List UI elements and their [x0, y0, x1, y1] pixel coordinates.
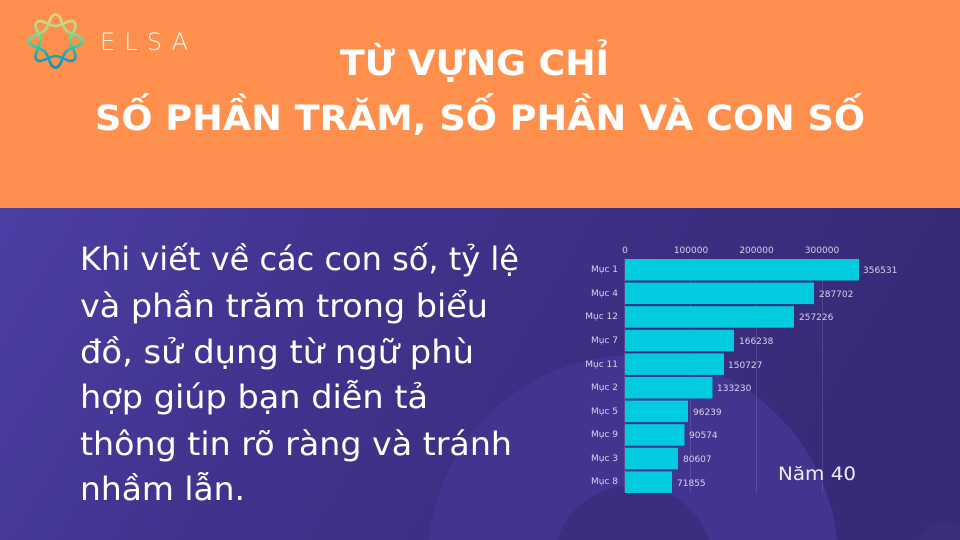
value labels: 96239 [693, 408, 722, 418]
category labels: Mục 11 [585, 360, 618, 370]
axis labels [622, 246, 839, 256]
value labels: 150727 [728, 361, 762, 371]
logo wordmark: ELSA [100, 28, 188, 56]
title: TỪ VỰNG CHỈ [340, 40, 609, 84]
text block: explanation [80, 240, 519, 508]
year label: Năm 40 [778, 463, 856, 485]
text block: explanation: hợp giúp bạn diễn tả [80, 378, 428, 416]
value labels: 80607 [683, 455, 712, 465]
category labels: Mục 9 [591, 430, 618, 440]
title: SỐ PHẦN TRĂM, SỐ PHẦN VÀ CON SỐ [95, 94, 865, 139]
category labels: Mục 5 [591, 407, 618, 417]
icon: ELSA logo [28, 13, 84, 69]
value labels: 71855 [677, 479, 706, 489]
title [95, 40, 865, 139]
value labels: 287702 [819, 290, 853, 300]
category labels: Mục 2 [591, 383, 618, 393]
text block: explanation: nhầm lẫn. [80, 470, 245, 508]
category labels [585, 265, 618, 487]
text block: explanation: Khi viết về các con số, tỷ lệ [80, 240, 519, 278]
axis labels: 100000 [674, 246, 708, 256]
value labels: 356531 [863, 266, 897, 276]
value labels: 166238 [739, 337, 774, 347]
category labels: Mục 7 [591, 336, 618, 346]
category labels: Mục 8 [591, 477, 618, 487]
category labels: Mục 1 [591, 265, 618, 275]
axis labels: 0 [622, 246, 628, 256]
text block: explanation: thông tin rõ ràng và tránh [80, 425, 512, 463]
panel: orange header [0, 0, 960, 208]
axis labels: 200000 [739, 246, 774, 256]
category labels: Mục 4 [591, 289, 618, 299]
category labels: Mục 12 [585, 312, 618, 322]
text block: explanation: và phần trăm trong biểu [80, 287, 488, 325]
value labels: 90574 [689, 431, 718, 441]
value labels: 133230 [717, 384, 752, 394]
value labels [677, 266, 897, 489]
text block: explanation: đồ, sử dụng từ ngữ phù [80, 333, 474, 371]
category labels: Mục 3 [591, 454, 618, 464]
bars [625, 259, 859, 493]
bar chart [585, 246, 897, 493]
panel: purple background [0, 208, 960, 540]
value labels: 257226 [799, 313, 834, 323]
axis labels: 300000 [805, 246, 839, 256]
